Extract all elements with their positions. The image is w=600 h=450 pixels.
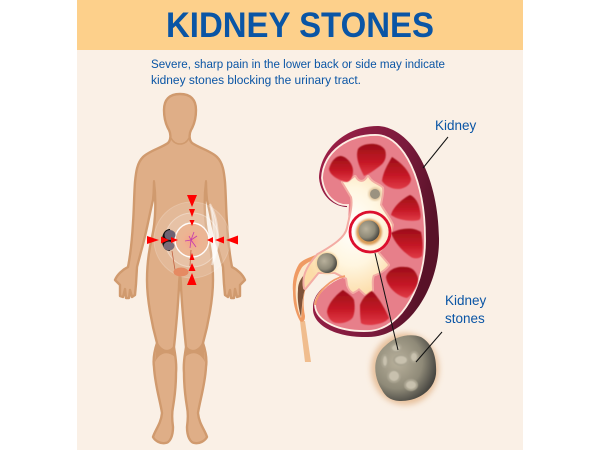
red highlight circle [350, 212, 390, 252]
title: KIDNEY STONES [166, 5, 434, 45]
renal sinus [304, 177, 392, 295]
red pain arrows [147, 195, 238, 285]
leader line: kidney stones to kidney [375, 253, 398, 350]
label: kidney stones: Kidney [445, 293, 487, 308]
large kidney stone [371, 333, 439, 405]
renal pyramids [327, 144, 423, 325]
centre stone [356, 219, 382, 245]
pain rings [154, 202, 230, 278]
left stone [316, 252, 338, 274]
leader line: stones label [416, 332, 442, 362]
label: kidney: Kidney [435, 118, 477, 133]
stone surface patches [382, 344, 418, 390]
kidney capsule [313, 126, 439, 337]
leader line: kidney label [423, 137, 448, 168]
intro text: Severe, sharp pain in the lower back or side may indicate [151, 57, 445, 71]
label: kidney stones: stones [445, 311, 485, 326]
header band [77, 0, 523, 50]
lower lobe lining [315, 276, 345, 305]
small stone [368, 188, 382, 200]
ureter and bladder [172, 250, 191, 276]
renal cortex [315, 135, 425, 331]
ureter [293, 254, 340, 362]
knee shading [155, 341, 205, 362]
panel: page background [77, 0, 523, 450]
human body figure [115, 94, 245, 443]
intro text: kidney stones blocking the urinary tract. [151, 73, 361, 87]
kidney cross-section [293, 126, 439, 362]
neck and chest creases [153, 138, 207, 200]
pain spot with nerves [180, 229, 204, 253]
body silhouette [115, 94, 245, 443]
small kidney [162, 229, 176, 251]
